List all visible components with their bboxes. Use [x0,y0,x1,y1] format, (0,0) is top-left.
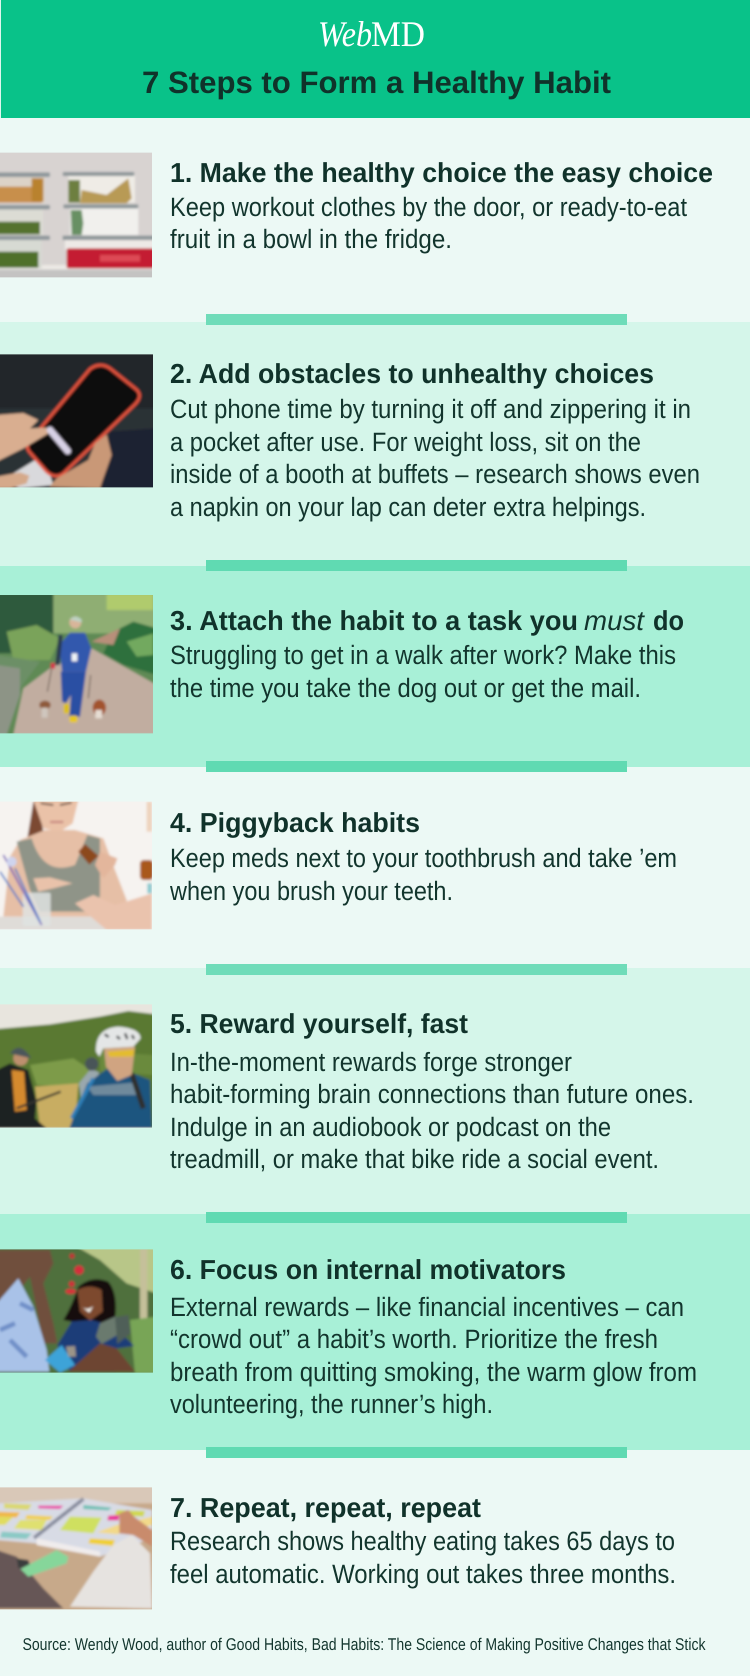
step 5 text: Indulge in an audiobook or podcast on the [170,1112,611,1142]
step 3 text: Struggling to get in a walk after work? Make this [170,640,676,670]
step 6 text: 6. Focus on internal motivators [170,1254,566,1285]
step 6 text: “crowd out” a habit’s worth. Prioritize the fresh [170,1324,658,1354]
photo: meal prep containers [0,150,157,280]
step 3 text [170,605,684,703]
step 7 text [170,1492,676,1589]
step 4 text: when you brush your teeth. [169,876,453,906]
step 3 text: 3. Attach the habit to a task you [170,605,578,636]
WebMD logo: Web [318,14,372,54]
step 1 text: Keep workout clothes by the door, or ready-to-eat [170,192,688,222]
WebMD logo: MD [371,14,425,54]
step 6 text: External rewards – like financial incentives – can [170,1292,684,1322]
step 1 text: fruit in a bowl in the fridge. [170,224,452,254]
title: 7 Steps to Form a Healthy Habit [142,65,611,100]
panel: step 5 [0,968,750,1214]
step 2 text [170,358,700,522]
step 4 text [169,807,677,906]
step 4 text: Keep meds next to your toothbrush and take ’em [170,843,677,873]
step 3 text: the time you take the dog out or get the mail. [170,673,641,703]
step 6 text: breath from quitting smoking, the warm glow from [170,1357,697,1387]
step 5 text [170,1008,694,1174]
step 5 text: treadmill, or make that bike ride a social event. [170,1144,659,1174]
step 2 text: a pocket after use. For weight loss, sit on the [170,427,641,457]
photo: two women gardening [0,1247,157,1377]
step 6 text [170,1254,697,1419]
photo: walking dogs on a path [0,592,157,735]
panel: step 7 [0,1487,674,1610]
step 6 text: volunteering, the runner’s high. [170,1389,493,1419]
step 3 text: do [653,605,684,636]
step 2 text: inside of a booth at buffets – research shows even [170,459,700,489]
step 4 text: 4. Piggyback habits [170,807,420,838]
step 2 text: Cut phone time by turning it off and zippering it in [170,394,691,424]
step 5 text: 5. Reward yourself, fast [170,1008,468,1039]
header panel [0,0,750,118]
step 7 text: Research shows healthy eating takes 65 days to [170,1526,675,1556]
step 1 text [170,157,713,254]
step 7 text: 7. Repeat, repeat, repeat [170,1492,481,1523]
panel: step 1 [0,152,712,278]
WebMD logo [318,14,425,54]
step 7 text: feel automatic. Working out takes three months. [170,1559,676,1589]
panel: step 4 [0,802,676,930]
photo: planner with sticky notes [0,1485,157,1612]
step 2 text: 2. Add obstacles to unhealthy choices [170,358,654,389]
panel: step 2 [0,322,750,566]
step 5 text: habit-forming brain connections than future ones. [170,1079,694,1109]
photo: woman taking medication [0,798,157,932]
step 3 text: must [584,605,645,636]
step 1 text: 1. Make the healthy choice the easy choice [170,157,713,188]
step 5 text: In-the-moment rewards forge stronger [170,1047,572,1077]
step 2 text: a napkin on your lap can deter extra helpings. [170,492,646,522]
panel: step 3 [0,566,750,767]
photo: hand holding phone [0,352,157,490]
photo: cyclists on a hill [0,1002,157,1132]
panel: step 6 [0,1214,750,1450]
